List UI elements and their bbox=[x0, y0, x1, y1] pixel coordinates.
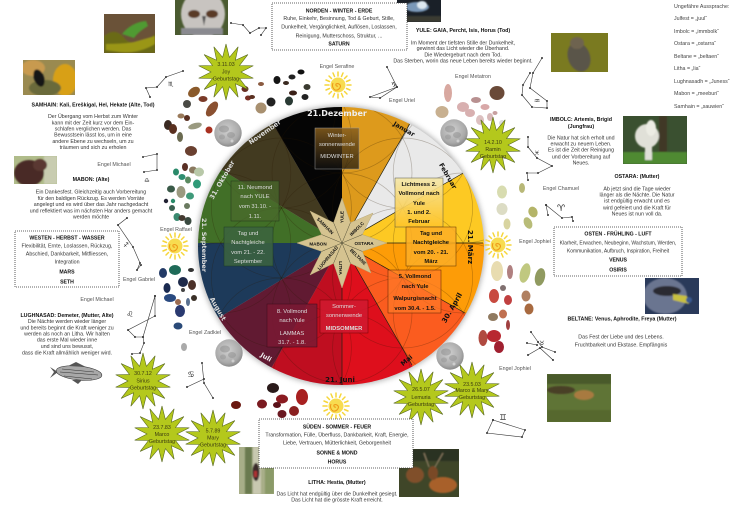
photo: eagle bbox=[645, 278, 699, 314]
text: Beltane: BELTANE: Venus, Aphrodite, Freya (Mutter) bbox=[567, 317, 677, 323]
icon: fish bbox=[50, 362, 103, 384]
zodiac symbols: ♊︎ bbox=[499, 413, 507, 422]
photo: snake bbox=[104, 14, 155, 53]
sector: Juli to August bbox=[218, 258, 330, 368]
birthday star: Lemuria: 26.5.07 bbox=[412, 387, 430, 393]
constellations bbox=[118, 23, 573, 437]
star label: IMBOLC: IMBOLC bbox=[349, 220, 366, 237]
text: Yule: Im Moment der tiefsten Stille der Dunkelheit, bbox=[411, 41, 515, 47]
constellation: Widder bbox=[546, 205, 573, 221]
gemstones: pink quartz bbox=[436, 84, 505, 126]
box: Tag und Nachtgleiche September: vom 21. - 22. bbox=[231, 250, 265, 256]
text: Ostara: Neues ist nun voll da. bbox=[612, 212, 662, 218]
birthday star: Lemuria: Geburtstag bbox=[408, 402, 434, 408]
box: 11. Neumond: nach YULE bbox=[240, 194, 270, 200]
zodiac symbols: ♉︎ bbox=[539, 340, 545, 347]
gemstones: winter blacks bbox=[249, 70, 310, 114]
birthday star: Joy bbox=[199, 44, 253, 100]
constellation: Waage bbox=[143, 154, 157, 172]
box: Osten: OSTEN - FRÜHLING - LUFT bbox=[584, 231, 652, 238]
month label: Juli: Juli bbox=[258, 350, 273, 364]
text: Imbolc: IMBOLC: Artemis, Brigid bbox=[550, 117, 612, 123]
label: Engel Metatron: Engel Metatron bbox=[455, 74, 491, 80]
box: Tag und Nachtgleiche September: Tag und bbox=[238, 231, 258, 237]
box: Tag und Nachtgleiche März: Tag und bbox=[420, 231, 443, 237]
text: Aussprache: Ungefähre Aussprache: bbox=[674, 4, 729, 10]
birthday star: Ramin: 14.2.10 bbox=[484, 140, 502, 146]
year wheel bbox=[198, 107, 484, 385]
text: Ostara: OSTARA: (Mutter) bbox=[615, 174, 660, 180]
birthday star: Ramin: Geburtstag bbox=[480, 154, 506, 160]
birthday star: Ramin: Ramin bbox=[485, 147, 501, 153]
birthday star: Sirius: 30.7.12 bbox=[134, 371, 152, 377]
text: Samhain: schlafen verglichen werden. Das bbox=[55, 126, 132, 132]
box: Süden: SÜDEN - SOMMER - FEUER bbox=[303, 424, 371, 431]
box: Süden: Liebe, Vertrauen, Mütterlichkeit, Geborgenheit bbox=[283, 441, 392, 447]
gemstones: autumn browns and greens bbox=[164, 85, 251, 225]
text: Ostara: ist endgültig erwacht und es bbox=[604, 199, 670, 205]
box: Westen: SETH bbox=[60, 280, 74, 286]
month label: 21. März: 21. März bbox=[466, 230, 474, 264]
sector: Oktober to November bbox=[222, 124, 328, 229]
text: Aussprache: Beltane = „beltaen“ bbox=[674, 54, 719, 60]
text: Imbolc: Es ist die Zeit der Reinigung bbox=[548, 148, 614, 154]
box: Lichtmess: Lichtmess 2. bbox=[401, 182, 437, 188]
month label: 31. Oktober: 31. Oktober bbox=[208, 158, 237, 201]
label: Engel Serafine: Engel Serafine bbox=[320, 64, 354, 70]
box: Osten: Kommunikation, Aufbruch, Inspiration, Freiheit bbox=[567, 249, 670, 255]
label: Engel Raffael: Engel Raffael bbox=[160, 227, 192, 233]
box: Sommersonnenwende bbox=[320, 300, 368, 333]
photo: otter bbox=[551, 33, 608, 72]
sector: Mai to Juni bbox=[342, 263, 413, 385]
photo: deer bbox=[399, 449, 459, 497]
label: Engel Zadkiel: Engel Zadkiel bbox=[189, 330, 221, 336]
month label: November: November bbox=[247, 118, 283, 146]
box: Lichtmess: Yule bbox=[413, 201, 426, 207]
photo: swan at night bbox=[397, 0, 441, 22]
zodiac symbols: ♈︎ bbox=[557, 204, 566, 214]
text: Mabon: für den baldigen Rückzug. Es werden Vorräte bbox=[38, 196, 144, 202]
box: Walpurgisnacht: nach Yule bbox=[402, 284, 429, 290]
box: Osten bbox=[554, 227, 682, 276]
text: Lughnasad: werden als noch an Litha. Wir halten bbox=[24, 332, 110, 338]
zodiac symbols: ♎︎ bbox=[144, 177, 150, 184]
box: Osten: Klarheit, Erwachen, Neubeginn, Wachstum, Werden, bbox=[560, 241, 676, 247]
month label: 30. April: 30. April bbox=[440, 291, 464, 325]
birthday star: Sirius: Geburtstag bbox=[130, 386, 156, 392]
text: Litha: LITHA: Hestia, (Mutter) bbox=[308, 480, 366, 486]
text: Lughnasad: LUGHNASAD: Demeter, (Mutter, Alte) bbox=[20, 313, 114, 319]
label: Engel Chamuel: Engel Chamuel bbox=[543, 186, 579, 192]
box: Wintersonnenwende: Winter- bbox=[328, 133, 346, 139]
text: Aussprache: Julfest = „juul“ bbox=[674, 16, 707, 22]
box: Lammas: 31.7. - 1.8. bbox=[278, 340, 306, 346]
box: Westen: WESTEN - HERBST - WASSER bbox=[29, 236, 105, 242]
birthday star: Joy: 3.11.03 bbox=[217, 62, 235, 68]
box: Norden: Reinigung, Mutterschoss, Struktur, ... bbox=[296, 34, 382, 40]
birthday star: Joy: Geburtstag bbox=[213, 76, 239, 82]
birthday star: Sirius: Sirius bbox=[136, 378, 150, 384]
text: Lughnasad: und bereits beginnt die Kraft weniger zu bbox=[20, 326, 114, 332]
sector: Juni to Juli bbox=[272, 263, 342, 385]
birthday star: Mary: Geburtstag bbox=[200, 442, 226, 448]
label: Engel Michael: Engel Michael bbox=[97, 162, 131, 168]
text: Mabon: werden möchte bbox=[73, 215, 109, 221]
text: Litha: Das Licht hat endgültig über die Dunkelheit gesiegt. bbox=[276, 492, 398, 498]
photo: white wolf bbox=[623, 116, 687, 164]
zodiac symbols bbox=[123, 81, 566, 422]
text: Aussprache: Litha = „lia“ bbox=[674, 66, 701, 72]
box: Walpurgisnacht: Walpurgisnacht bbox=[393, 296, 437, 302]
text: Samhain: kann mit der Zeit kurz vor dem Ein- bbox=[52, 120, 134, 126]
zodiac symbols: ♌︎ bbox=[126, 310, 134, 319]
box: Walpurgisnacht: 5. Vollmond bbox=[399, 274, 432, 280]
box: Lichtmess: Februar bbox=[408, 219, 431, 225]
box: Norden bbox=[272, 3, 407, 50]
zodiac symbols: ♒︎ bbox=[534, 97, 540, 105]
birthday star: Marco und Mary: Geburtstag bbox=[459, 395, 485, 401]
star label: LITHA: LITHA bbox=[338, 261, 343, 275]
constellation: Jungfrau bbox=[231, 23, 266, 35]
text: Imbolc: und der Vorbereitung auf bbox=[552, 155, 611, 161]
text: Ostara: länger als die Nächte. Die Natur bbox=[599, 193, 675, 199]
birthday star: Joy: Joy bbox=[222, 70, 230, 76]
label: Engel Gabriel: Engel Gabriel bbox=[123, 277, 155, 283]
text: Yule: Die Wiedergeburt nach dem Tod. bbox=[424, 53, 502, 59]
text: Imbolc: (Jungfrau) bbox=[568, 124, 594, 130]
constellation: Steinbock bbox=[370, 67, 397, 98]
text: Lughnasad bbox=[20, 313, 114, 357]
text: Beltane: Das Fest der Liebe und des Lebens. bbox=[578, 335, 664, 341]
text: Aussprache: Lughnasadh = „Juness“ bbox=[674, 79, 730, 85]
box: Lichtmess: Vollmond nach bbox=[398, 191, 440, 197]
month label: Mai: Mai bbox=[399, 353, 414, 368]
birthday star: Lemuria bbox=[394, 369, 448, 425]
text: Mabon: und reflektiert was im nächsten Har anders gemacht bbox=[30, 208, 153, 214]
box: 11. Neumond: 1.11. bbox=[249, 214, 262, 220]
text: Litha bbox=[276, 480, 398, 504]
month label: August: August bbox=[208, 296, 228, 322]
box: Tag und Nachtgleiche September: Nachtgleiche bbox=[231, 240, 265, 246]
birthday star: Lemuria: Lemuria bbox=[411, 395, 431, 401]
box: Norden: Dunkelheit, Vergänglichkeit, Auflösen, Loslassen, bbox=[281, 25, 397, 31]
box: Tag und Nachtgleiche März: vom 20. - 21. bbox=[414, 250, 449, 256]
text: Lughnasad: das erste Mal wieder inne bbox=[37, 338, 97, 344]
text: Ostara: wird gefeiert und die Kraft für bbox=[603, 206, 671, 212]
box: Süden: SONNE & MOND bbox=[317, 451, 358, 457]
text: Lughnasad: und sind uns bewusst, bbox=[41, 344, 93, 350]
photo: bear bbox=[14, 156, 57, 184]
text: Mabon: Ein Dankesfest. Gleichzeitig auch Vorbereitung bbox=[36, 190, 146, 196]
birthday star: Marco: Marco bbox=[155, 432, 169, 438]
constellation: Skorpion bbox=[146, 71, 183, 97]
label: Engel Uriel: Engel Uriel bbox=[389, 98, 415, 104]
box: Wintersonnenwende: sonnenwende bbox=[319, 142, 355, 148]
box: Süden: HORUS bbox=[328, 460, 347, 466]
text: Yule: gewinnt das Licht wieder die Überhand. bbox=[417, 45, 509, 52]
box: Wintersonnenwende bbox=[315, 128, 359, 169]
star label: BELTANE: BELTANE bbox=[349, 248, 367, 266]
birthday star: Mary bbox=[186, 410, 240, 466]
photo: owl bbox=[175, 0, 228, 35]
label: Engel Jophiel: Engel Jophiel bbox=[499, 366, 531, 372]
box: Norden: NORDEN - WINTER - ERDE bbox=[306, 9, 373, 15]
box: Westen: MARS bbox=[59, 270, 75, 276]
birthday star: Marco und Mary bbox=[445, 362, 499, 418]
birthday star: Mary: Mary bbox=[207, 436, 219, 442]
box: Westen: Integration bbox=[54, 260, 80, 266]
text: Samhain: andere Ebene zu wechseln, um zu bbox=[52, 139, 134, 145]
month label: 21. Dezember: 21.Dezember bbox=[307, 109, 367, 118]
box: 11. Neumond bbox=[231, 181, 279, 221]
text: Yule bbox=[393, 28, 533, 65]
text: Aussprache: Imbolc = „immbolk“ bbox=[674, 29, 719, 35]
box: Süden: Transformation, Fülle, Überfluss, Dankbarkeit, Kraft, Energie, bbox=[265, 432, 409, 439]
text: Samhain: SAMHAIN: Kali, Ereškigal, Hel, Hekate (Alte, Tod) bbox=[32, 103, 155, 109]
box: Tag und Nachtgleiche September bbox=[224, 227, 273, 266]
birthday star: Ramin bbox=[466, 117, 520, 173]
text: Yule: Das Sterben, worin das neue Leben bereits wieder beginnt. bbox=[393, 59, 533, 65]
sector: März to April bbox=[362, 243, 484, 314]
photo: crow in yellow foliage bbox=[23, 60, 75, 95]
box: Walpurgisnacht bbox=[388, 270, 441, 313]
box: Tag und Nachtgleiche März bbox=[406, 227, 456, 266]
birthday star: Marco und Mary: Marco & Mary bbox=[456, 388, 489, 394]
box: 11. Neumond: 11. Neumond bbox=[238, 185, 272, 191]
moons bbox=[214, 119, 468, 370]
box: Süden bbox=[259, 419, 413, 468]
star label: LUGHNASAD: LUGHNASAD bbox=[316, 245, 340, 271]
box: Osten: OSIRIS bbox=[609, 268, 627, 274]
constellation: Krebs bbox=[187, 363, 213, 398]
month label: Januar: Januar bbox=[391, 119, 417, 139]
box: Westen: Flexibilität, Ernte, Loslassen, Rückzug, bbox=[22, 244, 112, 250]
sector: September to Oktober bbox=[198, 170, 322, 243]
birthday star: Mary: 5.7.89 bbox=[206, 428, 220, 434]
gemstones: reds bottom bbox=[231, 383, 308, 418]
box: Lammas bbox=[267, 304, 317, 347]
box: Osten: VENUS bbox=[609, 258, 627, 264]
text: Mabon: angelegt und es wird über das Jahr nachgedacht bbox=[34, 202, 149, 208]
text: Lughnasad: dass die Kraft allmählich weniger wird. bbox=[22, 351, 112, 357]
box: Lammas: nach Yule bbox=[279, 318, 305, 324]
text: Imbolc: Die Natur hat sich erholt und bbox=[547, 136, 615, 142]
text: Aussprache: Samhain = „sauwien“ bbox=[674, 104, 724, 110]
text: Ostara bbox=[599, 174, 675, 218]
box: 11. Neumond: vom 31.10. - bbox=[239, 204, 271, 210]
gemstones: blues bbox=[159, 265, 197, 351]
star label: MABON: MABON bbox=[309, 242, 327, 246]
box: Lammas: LAMMAS bbox=[280, 331, 304, 337]
birthday star: Marco: Geburtstag bbox=[149, 439, 175, 445]
sector: April to Mai bbox=[356, 256, 466, 366]
box: Norden: SATURN bbox=[328, 42, 350, 48]
star label: OSTARA: OSTARA bbox=[354, 241, 374, 246]
text: Aussprache: Ostara = „ostarra“ bbox=[674, 41, 716, 47]
box: Walpurgisnacht: vom 30.4. - 1.5. bbox=[394, 306, 436, 312]
box: Westen: Abschied, Dankbarkeit, Mitfliessen, bbox=[26, 252, 108, 258]
box: Lammas: 8. Vollmond bbox=[277, 309, 307, 315]
birthday star: Marco bbox=[135, 406, 189, 462]
text: Beltane bbox=[567, 317, 677, 349]
month label: 21. September: 21. September bbox=[200, 218, 208, 273]
photo: woodpecker bbox=[239, 447, 274, 494]
text: Mabon: MABON: (Alte) bbox=[73, 177, 110, 183]
text: Mabon bbox=[30, 177, 153, 221]
sector: November to Dezember bbox=[273, 107, 342, 223]
gemstones: spring pale and olive bbox=[496, 183, 547, 314]
star label: SAMHAIN: SAMHAIN bbox=[316, 217, 335, 236]
text: Imbolc: erwacht zu neuem Leben. bbox=[551, 142, 611, 148]
text: Ostara: Ab jetzt sind die Tage wieder bbox=[603, 187, 671, 193]
label: Engel Michael: Engel Michael bbox=[80, 297, 114, 303]
box: Wintersonnenwende: MIDWINTER bbox=[320, 154, 354, 160]
sector: August to September bbox=[198, 243, 322, 318]
constellation: Löwe bbox=[128, 296, 155, 354]
box: Lichtmess: 1. und 2. bbox=[407, 210, 431, 216]
text: Beltane: Fruchtbarkeit und Ekstase. Empfängnis bbox=[575, 343, 668, 349]
box: Lichtmess bbox=[395, 178, 443, 227]
box: Tag und Nachtgleiche September: September bbox=[234, 259, 262, 265]
box: Norden: Ruhe, Einkehr, Besinnung, Tod & Geburt, Stille, bbox=[283, 16, 395, 22]
constellation: Stier bbox=[527, 332, 555, 360]
text: Aussprache: Mabon = „meeburi“ bbox=[674, 91, 719, 97]
zodiac symbols: ♓︎ bbox=[534, 150, 540, 157]
centre star bbox=[297, 198, 387, 288]
box: Sommersonnenwende: MIDSOMMER bbox=[326, 326, 363, 332]
birthday star: Marco: 23.7.83 bbox=[153, 425, 171, 431]
zodiac symbols: ♑︎ bbox=[391, 81, 397, 89]
text: Imbolc: Neues. bbox=[573, 161, 589, 167]
zodiac symbols: ♐︎ bbox=[123, 242, 129, 249]
box: Tag und Nachtgleiche März: März bbox=[424, 259, 438, 265]
box: Sommersonnenwende: sonnenwende bbox=[326, 313, 362, 319]
text: Yule: YULE: GAIA, Percht, Isis, Horus (Tod) bbox=[416, 28, 510, 34]
suns bbox=[162, 72, 511, 419]
constellation: Zwillinge bbox=[487, 420, 525, 437]
zodiac symbols: ♋︎ bbox=[187, 370, 195, 379]
zodiac symbols: ♏︎ bbox=[168, 81, 174, 88]
text: Samhain: Bewusstsein lässt los, um in eine bbox=[54, 133, 132, 139]
text: Litha: Das Licht hat die grösste Kraft erreicht. bbox=[291, 498, 383, 504]
text: Samhain bbox=[32, 103, 155, 151]
constellation: Fische bbox=[527, 137, 552, 180]
text: Samhain: träumen und sich zu erholen bbox=[60, 145, 126, 151]
star label: YULE: YULE bbox=[340, 211, 344, 223]
sector: Dezember to Januar bbox=[342, 107, 410, 223]
constellation: Wassermann bbox=[522, 58, 547, 108]
photo: beaver bbox=[547, 374, 611, 422]
wheel shadow bbox=[197, 106, 485, 386]
constellation: Schütze bbox=[118, 218, 141, 270]
birthday star: Marco und Mary: 23.5.03 bbox=[463, 382, 481, 388]
text: Lughnasad: Die Nächte werden wieder länger bbox=[28, 319, 106, 325]
text: Aussprache bbox=[674, 4, 730, 110]
text: Imbolc bbox=[547, 117, 615, 167]
box: Sommersonnenwende: Sommer- bbox=[332, 304, 356, 310]
birthday star: Sirius bbox=[116, 353, 170, 409]
box: Tag und Nachtgleiche März: Nachtgleiche bbox=[413, 240, 450, 246]
box: Westen bbox=[15, 231, 119, 287]
text: Samhain: Der Übergang vom Herbst zum Winter bbox=[48, 113, 138, 120]
sector: Januar to Februar bbox=[355, 124, 462, 230]
gemstones: reds right bbox=[478, 261, 513, 353]
label: Engel Jophiel: Engel Jophiel bbox=[519, 239, 551, 245]
sector: Februar to März bbox=[362, 173, 484, 243]
month label: Februar: Februar bbox=[437, 162, 459, 191]
month label: 21. Juni: 21. Juni bbox=[325, 376, 355, 384]
